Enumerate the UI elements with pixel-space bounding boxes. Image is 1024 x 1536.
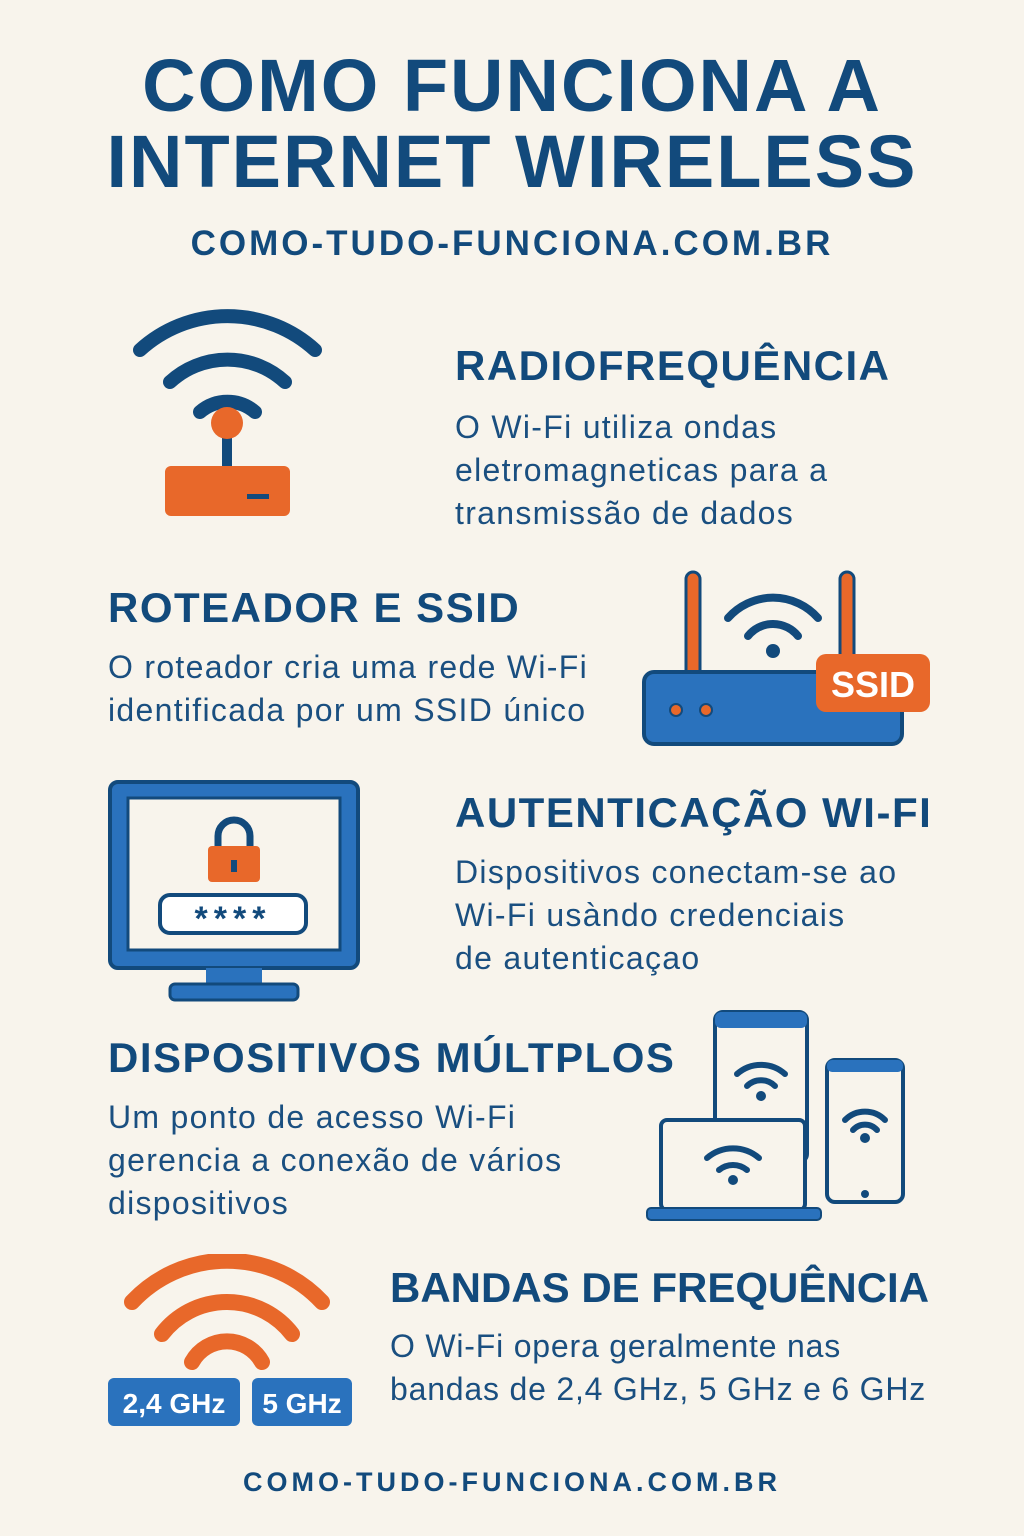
text: autenticacao: Wi-Fi usàndo credenciais: [455, 897, 845, 933]
title: INTERNET WIRELESS: [106, 120, 918, 203]
icon: monitor lock: [108, 780, 360, 1002]
icon: wifi antenna: [133, 309, 322, 516]
heading: radiofrequencia: RADIOFREQUÊNCIA: [455, 342, 891, 389]
footer: COMO-TUDO-FUNCIONA.COM.BR: [243, 1467, 781, 1497]
icon: monitor lock: ****: [195, 900, 271, 938]
icon: frequency bands: 5 GHz: [262, 1388, 342, 1419]
text: dispositivos: [108, 1099, 562, 1221]
icon: router ssid: SSID: [831, 664, 915, 705]
text: autenticacao: de autenticaçao: [455, 940, 700, 976]
text: radiofrequencia: O Wi-Fi utiliza ondas: [455, 409, 778, 445]
heading: autenticacao: AUTENTICAÇÃO WI-FI: [455, 789, 932, 836]
text: autenticacao: [455, 854, 897, 976]
text: radiofrequencia: [455, 409, 828, 531]
icon: devices: [646, 1010, 905, 1221]
text: dispositivos: Um ponto de acesso Wi-Fi: [108, 1099, 516, 1135]
subtitle: COMO-TUDO-FUNCIONA.COM.BR: [191, 224, 833, 263]
text: roteador: identificada por um SSID único: [108, 692, 586, 728]
icon: router ssid: [642, 570, 930, 746]
text: radiofrequencia: transmissão de dados: [455, 495, 794, 531]
title: COMO FUNCIONA A: [142, 44, 882, 127]
icon: frequency bands: 2,4 GHz: [123, 1388, 225, 1419]
heading: roteador: ROTEADOR E SSID: [108, 584, 520, 631]
text: dispositivos: dispositivos: [108, 1185, 289, 1221]
icon: frequency bands: [108, 1254, 352, 1426]
heading: bandas: BANDAS DE FREQUÊNCIA: [390, 1264, 929, 1311]
text: bandas: bandas de 2,4 GHz, 5 GHz e 6 GHz: [390, 1371, 926, 1407]
text: bandas: O Wi-Fi opera geralmente nas: [390, 1328, 841, 1364]
heading: dispositivos: DISPOSITIVOS MÚLTPLOS: [108, 1034, 675, 1081]
text: roteador: O roteador cria uma rede Wi-Fi: [108, 649, 588, 685]
text: dispositivos: gerencia a conexão de vários: [108, 1142, 562, 1178]
text: bandas: [390, 1328, 926, 1407]
title: [106, 44, 918, 203]
text: radiofrequencia: eletromagneticas para a: [455, 452, 828, 488]
text: autenticacao: Dispositivos conectam-se ao: [455, 854, 897, 890]
text: roteador: [108, 649, 588, 728]
